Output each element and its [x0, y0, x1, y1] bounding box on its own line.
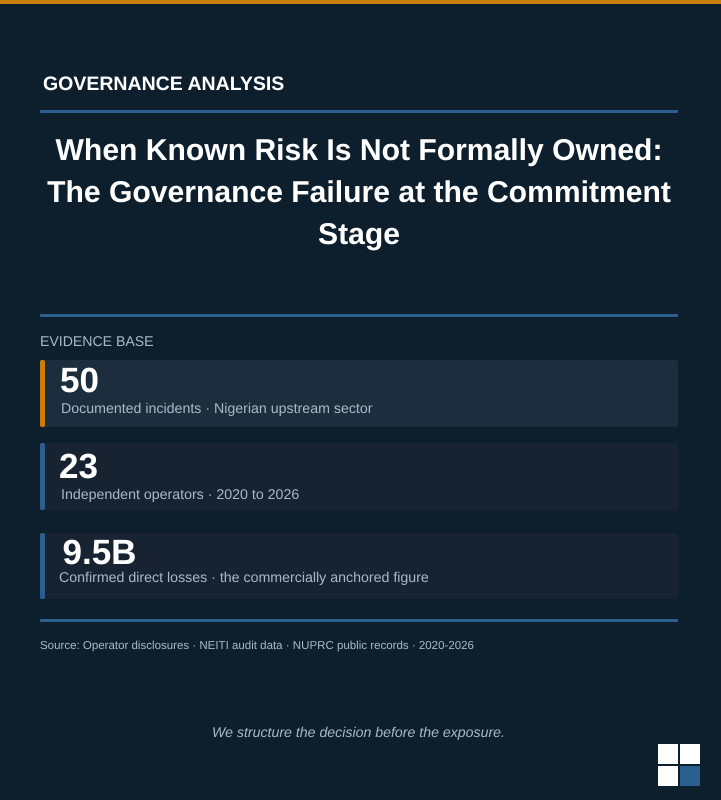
panel: stat 50 incidents: [40, 360, 678, 427]
panel: stat 9.5B losses: [40, 533, 678, 599]
title: The Governance Failure at the Commitment: [47, 176, 671, 209]
source note: Source: Operator disclosures · NEITI audit data · NUPRC public records · 2020-2026: [40, 640, 474, 652]
accent bar: blue: [40, 443, 45, 510]
title: Stage: [318, 218, 400, 251]
stat number: 9.5B: 9.5B: [62, 533, 136, 572]
stat number: 23: 23: [59, 447, 98, 486]
section label: EVIDENCE BASE: [40, 333, 154, 349]
icon: logo grid: [658, 744, 700, 786]
stat description: losses: Confirmed direct losses · the commercially anchored figure: [59, 570, 429, 586]
title: When Known Risk Is Not Formally Owned:: [56, 134, 662, 167]
stat description: operators: Independent operators · 2020 to 2026: [61, 487, 299, 503]
top accent bar: [0, 0, 721, 4]
eyebrow heading: GOVERNANCE ANALYSIS: [43, 73, 284, 95]
tagline: We structure the decision before the exposure.: [212, 724, 505, 740]
accent bar: blue: [40, 533, 45, 599]
panel: stat 23 operators: [40, 443, 678, 510]
accent bar: amber: [40, 360, 45, 427]
stat number: 50: 50: [60, 361, 99, 400]
title: [47, 134, 671, 251]
stat description: incidents: Documented incidents · Nigerian upstream sector: [61, 401, 372, 417]
